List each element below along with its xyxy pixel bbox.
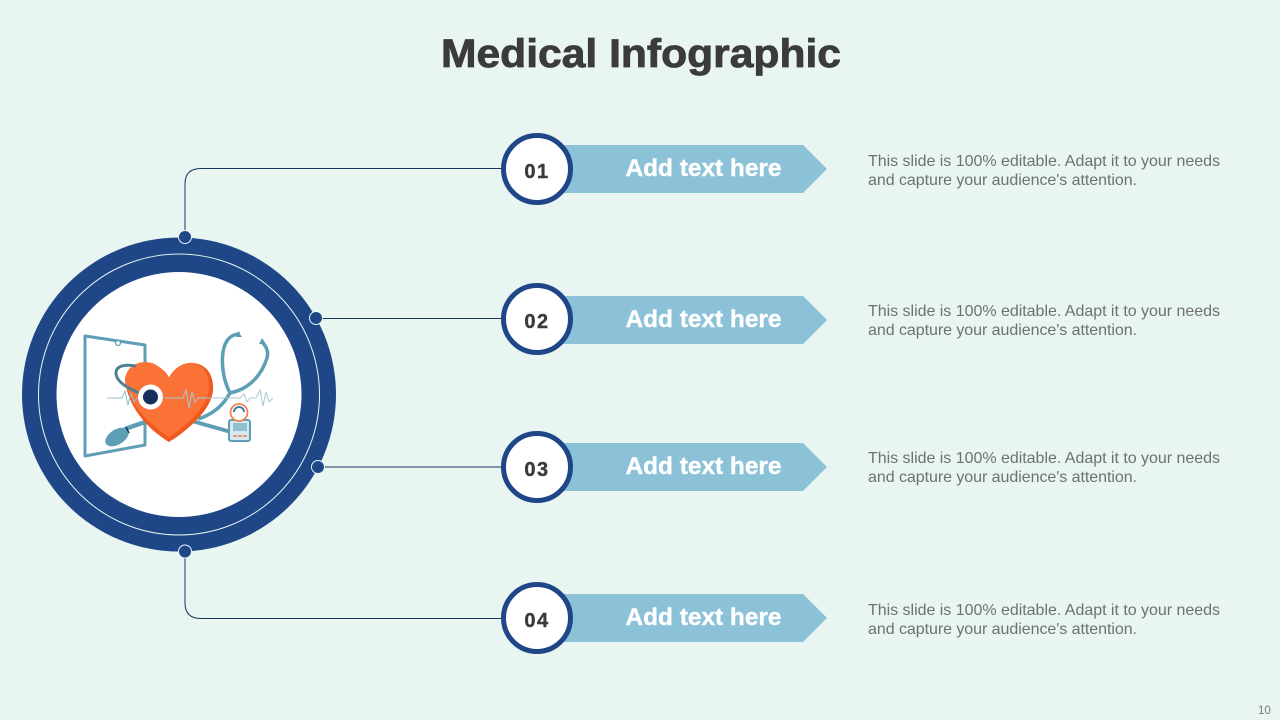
number 01: 01 [524, 161, 550, 183]
badge 02 [504, 286, 570, 352]
connector node lower right [312, 460, 324, 474]
connector: ring to row 04 [185, 551, 502, 618]
badge 01 [504, 136, 570, 202]
description 04: and capture your audience's attention. [868, 621, 1137, 638]
description 04: This slide is 100% editable. Adapt it to your needs [868, 602, 1220, 619]
page number: 10 [1258, 705, 1271, 717]
badge 03 [504, 434, 570, 500]
number 02: 02 [524, 311, 550, 333]
row 03 [504, 434, 1220, 500]
icon: medical heart with stethoscope [85, 331, 273, 456]
heading 01: Add text here [626, 155, 782, 182]
banner 01 [560, 145, 827, 193]
connector node top [178, 230, 192, 244]
description 01: and capture your audience's attention. [868, 172, 1137, 189]
row 02 [504, 286, 1220, 352]
connector: ring to row 01 [185, 168, 502, 237]
badge 04 [504, 584, 570, 652]
connector node bottom [178, 545, 192, 558]
banner 02 [560, 296, 827, 344]
description 03: and capture your audience's attention. [868, 469, 1137, 486]
row 01 [504, 136, 1220, 202]
description 01: This slide is 100% editable. Adapt it to your needs [868, 153, 1220, 170]
row 04 [504, 584, 1220, 652]
heading 04: Add text here [626, 604, 782, 631]
central ring [22, 238, 336, 552]
banner 03 [560, 443, 827, 491]
connector: ring to row 03 [318, 466, 502, 468]
heading 03: Add text here [626, 453, 782, 480]
description 02: and capture your audience's attention. [868, 322, 1137, 339]
title: Medical Infographic [441, 32, 841, 76]
connector: ring to row 02 [316, 318, 502, 320]
description 03: This slide is 100% editable. Adapt it to your needs [868, 450, 1220, 467]
heading 02: Add text here [626, 306, 782, 333]
number 04: 04 [524, 610, 550, 632]
banner 04 [560, 594, 827, 642]
connector node upper right [310, 312, 322, 324]
description 02: This slide is 100% editable. Adapt it to your needs [868, 303, 1220, 320]
number 03: 03 [524, 459, 550, 481]
